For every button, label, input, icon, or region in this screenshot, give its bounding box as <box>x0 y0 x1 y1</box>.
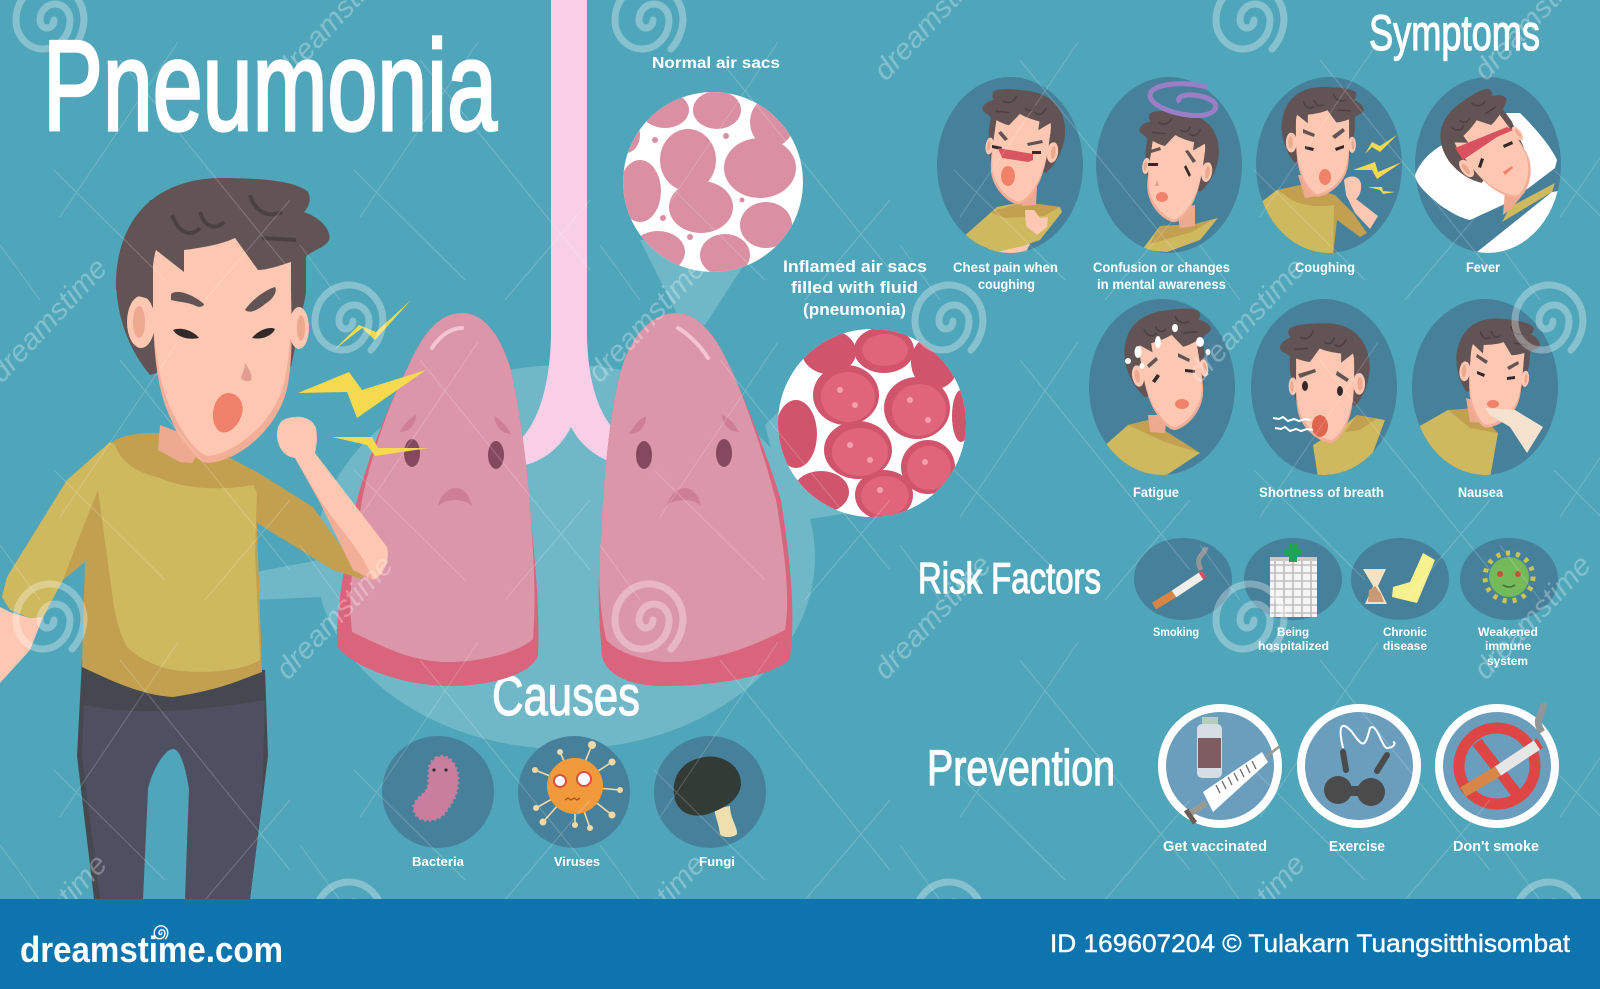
cause labels: Fungi <box>699 854 735 869</box>
title: Pneumonia <box>43 15 498 158</box>
risk: chronic disease <box>1351 538 1449 620</box>
arm and fist <box>277 417 388 580</box>
risk captions: system <box>1487 656 1528 668</box>
sweater <box>2 433 365 697</box>
label: inflamed air sacs: (pneumonia) <box>803 301 906 319</box>
prevention captions: Get vaccinated <box>1163 838 1267 855</box>
trousers <box>77 660 268 899</box>
watermark pattern: dreamstime <box>269 549 400 686</box>
caption: Nausea <box>1458 485 1503 500</box>
cause: viruses <box>518 736 630 848</box>
heading: symptoms: Symptoms <box>1369 5 1540 61</box>
man coughing <box>0 178 388 899</box>
symptom: chest pain when coughing <box>937 77 1083 292</box>
risk: smoking <box>1134 538 1232 620</box>
caption: Fever <box>1466 260 1501 275</box>
pain bolts <box>298 300 429 456</box>
cause labels <box>412 854 735 869</box>
symptom: nausea <box>1412 299 1558 500</box>
right lung <box>599 313 792 686</box>
left hand <box>0 607 43 683</box>
watermark pattern: dreamstime <box>1467 549 1598 686</box>
sweat drops <box>1125 324 1210 369</box>
dizzy swirl <box>1150 84 1216 116</box>
panel: prevention <box>1162 703 1555 855</box>
prevention: get vaccinated <box>1162 708 1280 824</box>
cause: bacteria <box>382 736 494 848</box>
cause: fungi <box>654 736 766 848</box>
panel: causes <box>382 736 766 869</box>
risk captions: immune <box>1485 641 1531 653</box>
watermark pattern: dreamstime <box>867 549 998 686</box>
risk captions: Weakened <box>1478 627 1538 639</box>
prevention captions: Don't smoke <box>1453 838 1539 855</box>
risk: weakened immune system <box>1460 538 1558 620</box>
symptom: fatigue <box>1089 299 1235 500</box>
trachea <box>520 0 625 466</box>
heading: risk factors: Risk Factors <box>918 554 1101 603</box>
caption: coughing <box>978 277 1035 292</box>
symptom: coughing <box>1256 77 1402 275</box>
panel: risk factors <box>1134 538 1558 668</box>
risk captions <box>1153 627 1538 668</box>
normal air sacs magnifier <box>612 91 803 276</box>
caption: Fatigue <box>1133 485 1179 500</box>
cause labels: Bacteria <box>412 854 465 869</box>
lung backdrop circle <box>250 240 855 749</box>
pillow <box>1415 113 1557 220</box>
caption: in mental awareness <box>1097 277 1226 292</box>
inflamed air sacs magnifier <box>775 327 970 520</box>
label: inflamed air sacs: filled with fluid <box>791 279 918 297</box>
risk captions: Being <box>1277 627 1309 639</box>
cause labels: Viruses <box>554 854 600 869</box>
caption: Confusion or changes <box>1093 260 1230 275</box>
neck <box>158 425 200 463</box>
watermark pattern: dreamstime <box>581 252 712 389</box>
watermark pattern: dreamstime <box>1181 848 1312 985</box>
bolts <box>1353 135 1402 194</box>
risk captions: Chronic <box>1383 627 1428 639</box>
label: inflamed air sacs <box>783 258 927 319</box>
prevention: don't smoke <box>1439 703 1555 824</box>
risk: being hospitalized <box>1244 538 1342 620</box>
caption <box>953 260 1058 292</box>
risk captions: Smoking <box>1153 627 1199 639</box>
symptom: confusion <box>1093 77 1242 292</box>
footer credit: ID 169607204 © Tulakarn Tuangsitthisombat <box>1050 930 1570 958</box>
right lung face <box>629 415 739 506</box>
heading: causes: Causes <box>492 664 640 727</box>
symptom: shortness of breath <box>1251 299 1397 500</box>
prevention captions: Exercise <box>1329 838 1385 855</box>
label: inflamed air sacs: Inflamed air sacs <box>783 258 927 276</box>
watermark pattern: dreamstime <box>1181 252 1312 389</box>
prevention: exercise <box>1301 708 1417 824</box>
caption: Chest pain when <box>953 260 1058 275</box>
left lung <box>337 313 538 686</box>
breath lines <box>1273 417 1313 431</box>
caption <box>1093 260 1230 292</box>
symptom: fever <box>1415 77 1565 275</box>
heading: prevention: Prevention <box>927 740 1115 796</box>
watermark pattern: dreamstime <box>581 848 712 985</box>
prevention captions <box>1163 838 1539 855</box>
left lung face <box>400 415 511 506</box>
caption: Coughing <box>1295 260 1355 275</box>
risk captions: hospitalized <box>1258 641 1329 653</box>
footer logo: dreamstime.com <box>20 929 283 970</box>
face <box>171 287 276 432</box>
risk captions: disease <box>1383 641 1427 653</box>
label: normal air sacs: Normal air sacs <box>652 55 780 72</box>
caption: Shortness of breath <box>1259 485 1384 500</box>
footer bar <box>0 899 1600 989</box>
